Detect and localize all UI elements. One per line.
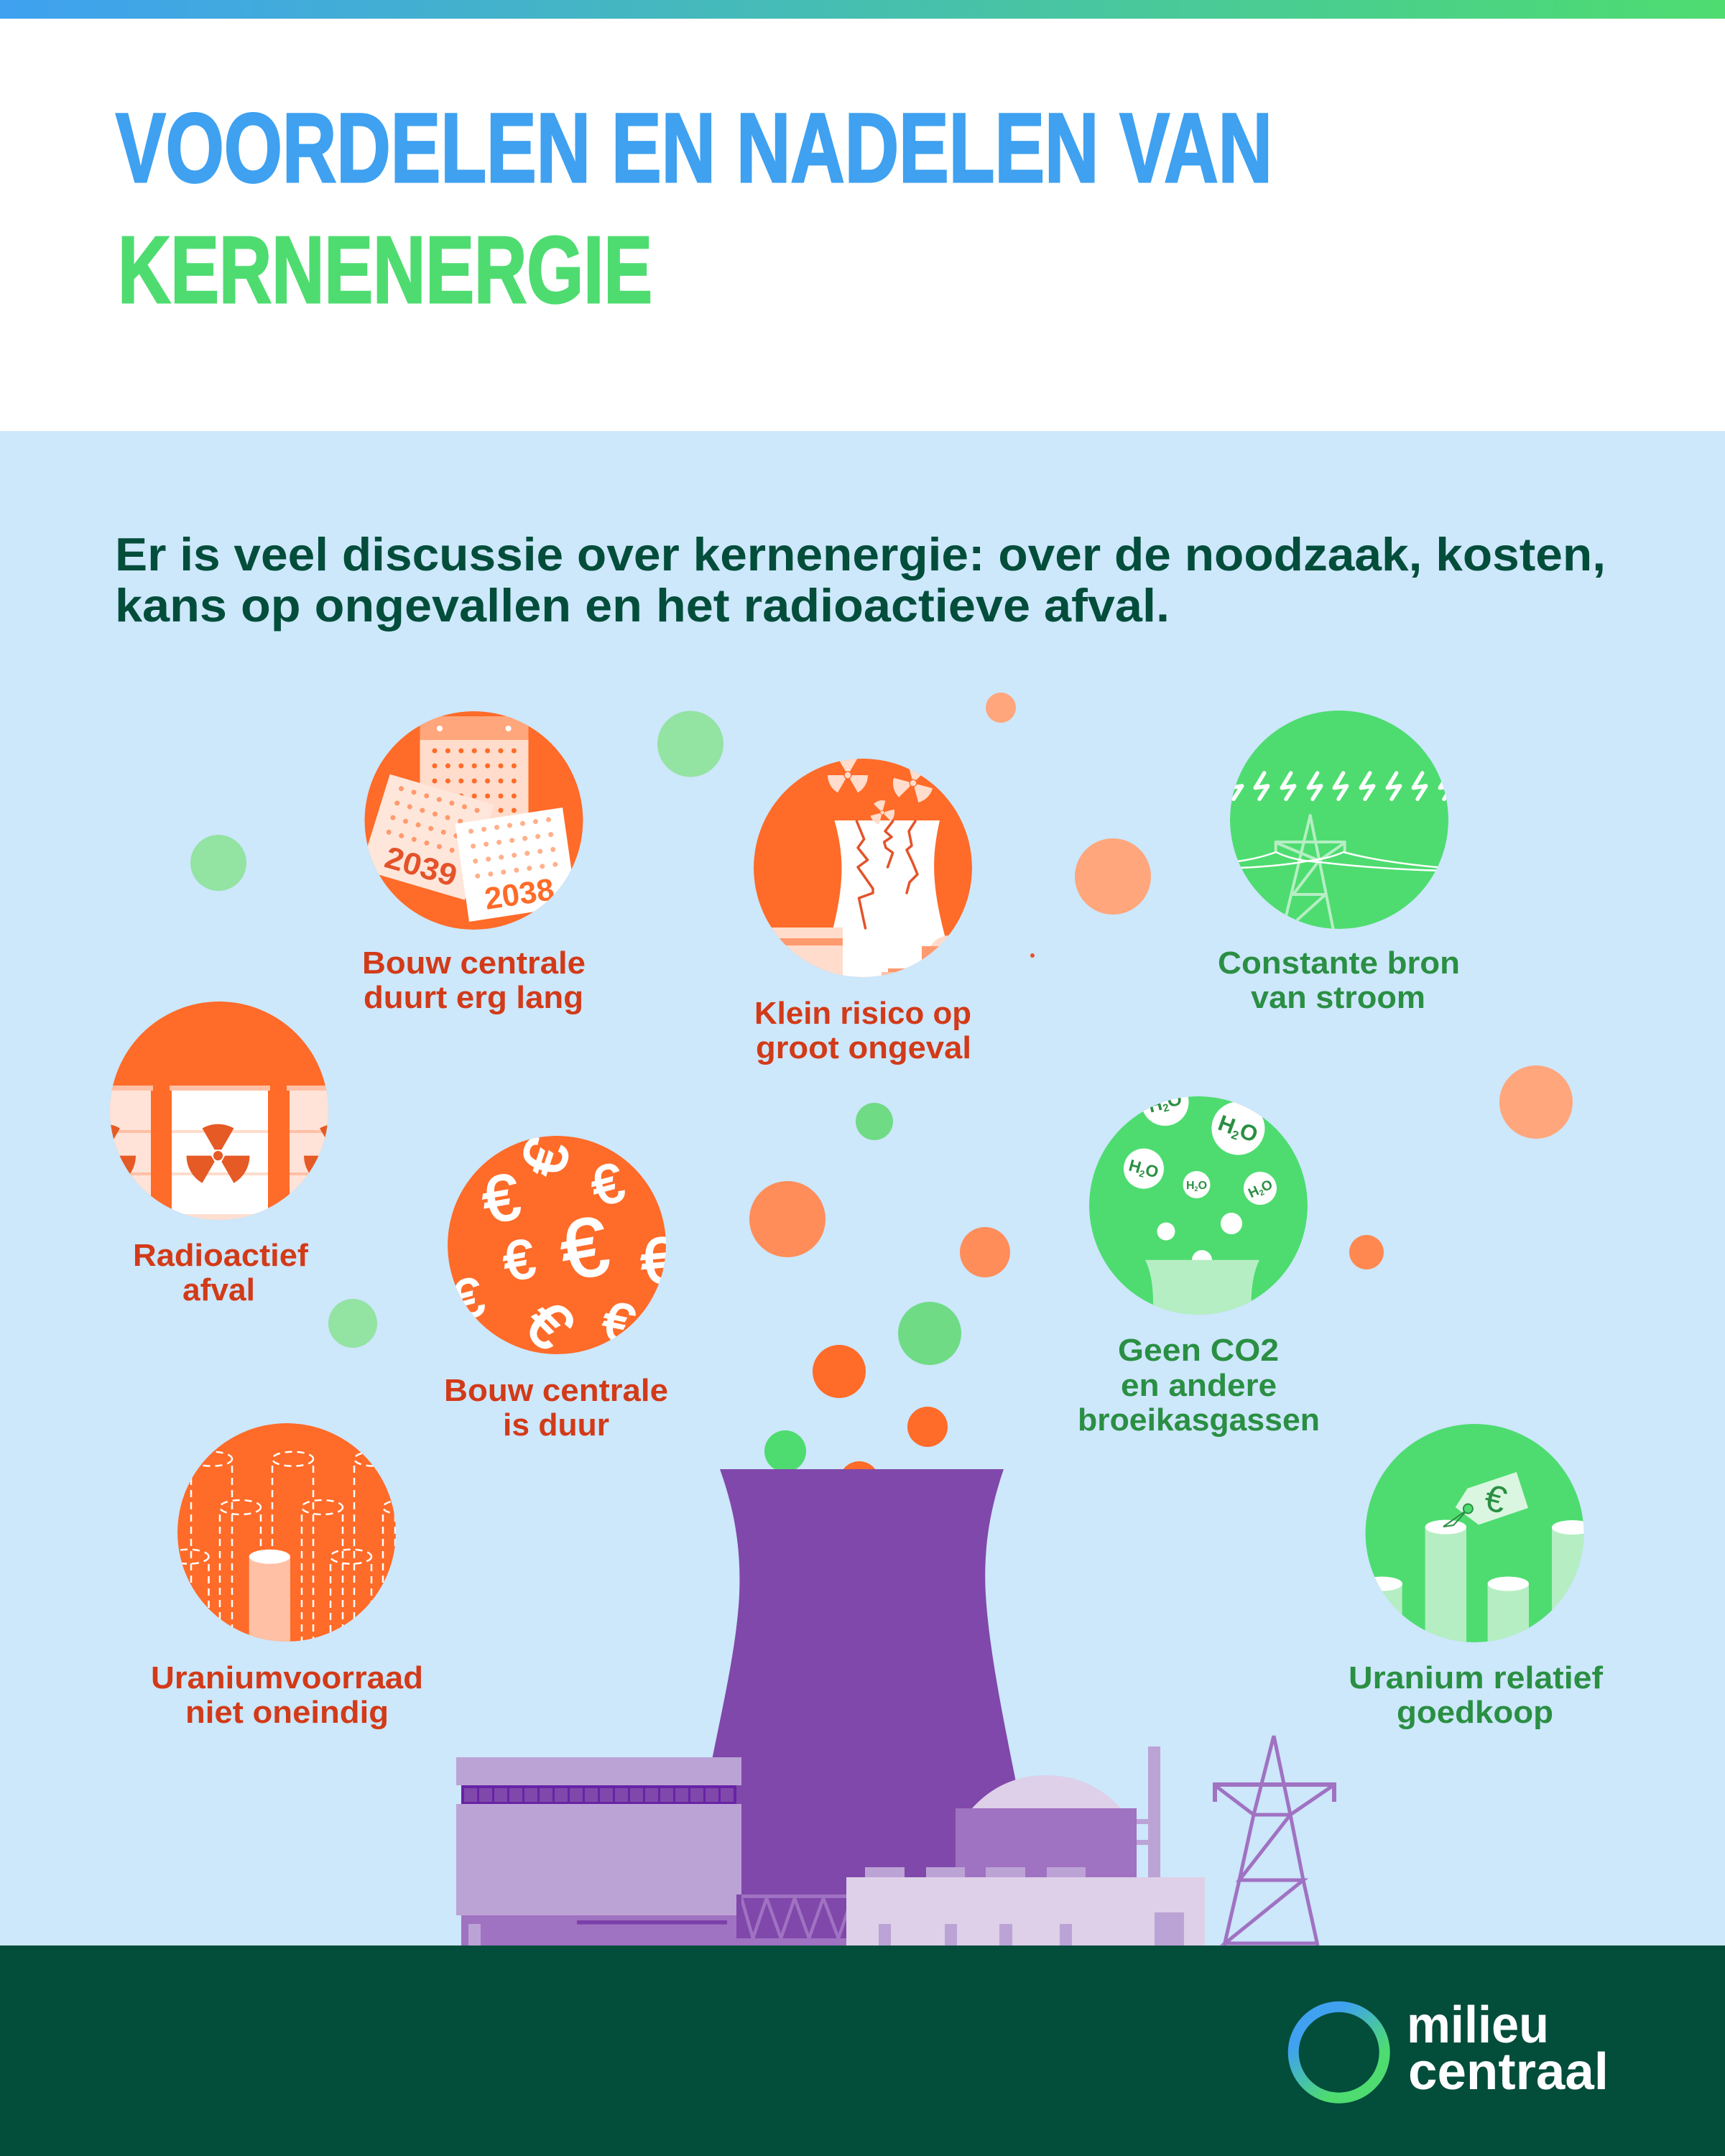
icon: calendars	[361, 711, 583, 930]
label: constante bron	[1218, 945, 1460, 1015]
chimney	[1137, 1746, 1160, 1877]
label: geen co2: broeikasgassen	[1078, 1402, 1320, 1438]
icon: euros: €	[597, 1290, 639, 1356]
icon: euros: €	[638, 1224, 680, 1299]
icon: water vapour: O	[1259, 1178, 1275, 1195]
low building	[846, 1867, 1205, 1946]
logo wordmark: centraal	[1408, 2043, 1609, 2101]
label: geen co2: Geen CO2	[1118, 1333, 1279, 1368]
intro text: Er is veel discussie over kernenergie: over de noodzaak, kosten,	[115, 528, 1606, 580]
icon: uranium rods dashed	[177, 1423, 396, 1642]
label: bouw is duur	[444, 1373, 668, 1443]
logo: milieu centraal	[1293, 1997, 1609, 2101]
icon: water vapour: H	[1246, 1183, 1262, 1201]
label: bouw duurt lang: duurt erg lang	[364, 980, 583, 1015]
label: bouw duurt lang: Bouw centrale	[362, 945, 586, 981]
icon: water vapour: 2	[1258, 1188, 1266, 1198]
icon: water vapour: 2	[1138, 1167, 1146, 1180]
logo ring	[1293, 2007, 1384, 2098]
background panel	[0, 431, 1725, 1946]
label: klein risico: groot ongeval	[756, 1030, 971, 1065]
icon: uranium rods with price tag	[1361, 1424, 1593, 1650]
top gradient bar	[0, 0, 1725, 19]
turbine hall left	[456, 1757, 846, 1946]
label: uranium goedkoop: goedkoop	[1397, 1695, 1553, 1730]
icon: water vapour: O	[1198, 1180, 1207, 1192]
icon: euros: €	[585, 1152, 630, 1218]
rising bubbles	[190, 693, 1573, 1502]
label: uranium goedkoop: Uranium relatief	[1349, 1660, 1603, 1695]
icon: water vapour: H	[1146, 1093, 1165, 1117]
icon: water vapour: H	[1127, 1156, 1143, 1177]
icon: radioactive barrels	[110, 1001, 328, 1220]
icon: water vapour: H	[1215, 1110, 1239, 1139]
label: constante bron: Constante bron	[1218, 945, 1460, 981]
pylon	[1215, 1736, 1334, 1946]
icon: cracked cooling tower	[754, 755, 972, 984]
icon: water vapour: 2	[1195, 1185, 1198, 1193]
icon: calendars: 2039	[381, 840, 461, 894]
label: radioactief afval	[133, 1238, 308, 1308]
title line 2: KERNENERGIE	[118, 217, 652, 323]
icon: water vapour: O	[1144, 1160, 1161, 1182]
icon: uranium rods with price tag: €	[1480, 1476, 1511, 1522]
intro text: kans op ongevallen en het radioactieve afval.	[115, 579, 1170, 631]
label: uraniumvoorraad: niet oneindig	[185, 1695, 389, 1730]
icon: water vapour: 2	[1162, 1101, 1170, 1115]
icon: euros: €	[477, 1160, 525, 1238]
reactor dome	[972, 1775, 1121, 1808]
label: bouw is duur: is duur	[503, 1407, 609, 1443]
icon: euros: €	[554, 1199, 615, 1298]
logo wordmark: milieu	[1407, 1997, 1549, 2054]
icon: euros: €	[445, 1266, 490, 1333]
label: geen co2	[1078, 1333, 1320, 1438]
header panel	[0, 0, 1725, 431]
icon: euros: €	[507, 1131, 583, 1185]
label: uraniumvoorraad: Uraniumvoorraad	[151, 1660, 423, 1695]
icon: water vapour	[1089, 1096, 1308, 1315]
icon: water vapour: O	[1165, 1087, 1184, 1112]
truss connection	[736, 1894, 852, 1938]
icon: water vapour: H	[1186, 1180, 1195, 1192]
icon: water vapour: O	[1236, 1118, 1262, 1147]
label: klein risico: Klein risico op	[754, 996, 971, 1031]
label: radioactief afval: Radioactief	[133, 1238, 308, 1273]
label: radioactief afval: afval	[182, 1272, 255, 1308]
label: bouw duurt lang	[362, 945, 586, 1015]
cooling tower	[708, 1469, 1020, 1911]
label: constante bron: van stroom	[1251, 980, 1425, 1015]
title line 1: VOORDELEN EN NADELEN VAN	[116, 93, 1272, 203]
label: uranium goedkoop	[1349, 1660, 1603, 1730]
icon: water vapour: 2	[1229, 1128, 1241, 1143]
label: uraniumvoorraad	[151, 1660, 423, 1730]
footer band	[0, 1946, 1725, 2156]
reactor block	[956, 1808, 1137, 1877]
label: geen co2: en andere	[1121, 1368, 1277, 1403]
logo wordmark	[1407, 1997, 1609, 2101]
label: bouw is duur: Bouw centrale	[444, 1373, 668, 1408]
icon: euros: €	[499, 1228, 539, 1293]
intro text	[115, 528, 1606, 631]
icon: euros	[448, 1136, 666, 1354]
illustration: nuclear power plant	[456, 1469, 1334, 1946]
icon: power pylon and lightning	[1229, 711, 1453, 930]
icon: calendars: 2038	[482, 872, 556, 917]
icon: euros: €	[511, 1287, 587, 1363]
label: klein risico	[754, 996, 971, 1065]
